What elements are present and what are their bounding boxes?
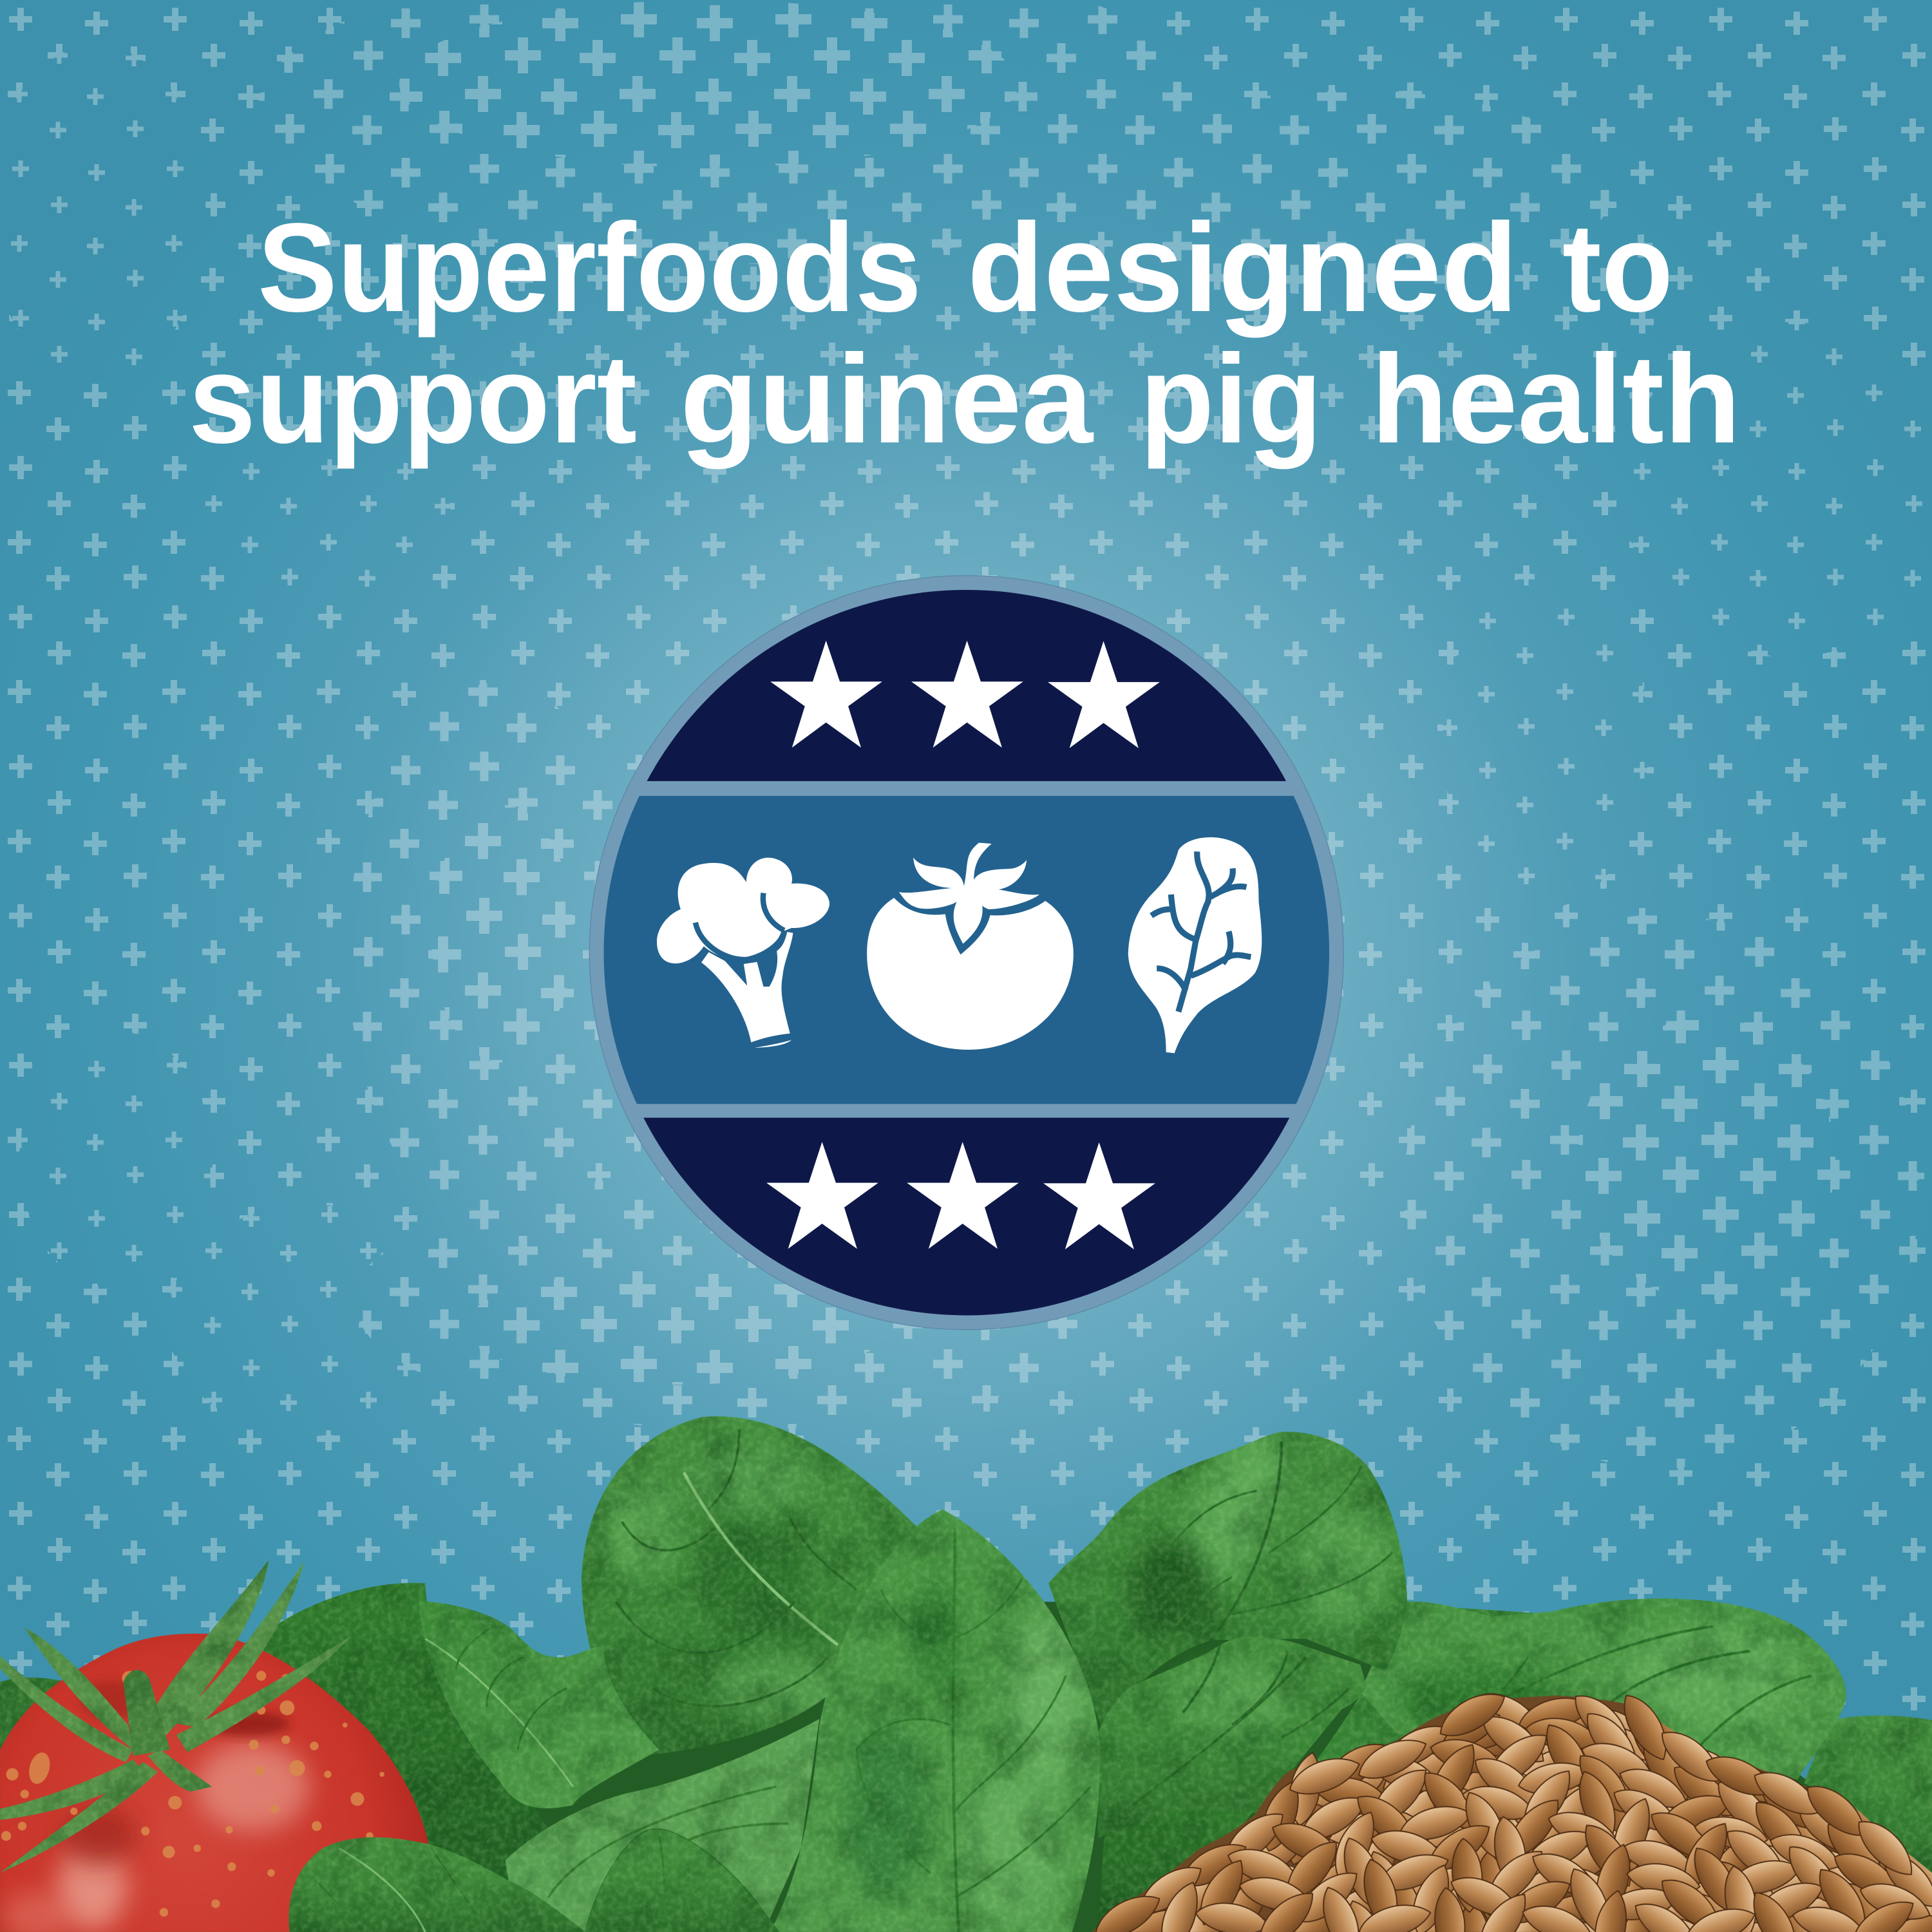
food photo band: spinach, tomato and flax seeds [0,1416,1932,1932]
title [189,197,1741,469]
tomato calyx [0,1560,351,1873]
badge: round emblem with stars and vegetable icons [580,567,1352,1340]
title: Superfoods [258,197,922,338]
spinach leaves: back layer [0,1416,1932,1880]
title: to [1562,197,1673,338]
icon: tomato [867,843,1074,1050]
title: pig [1140,328,1322,469]
spinach leaves: middle layer [419,1510,1367,1932]
icon: top row of three stars [770,641,1160,748]
title: health [1371,328,1741,469]
icon: broccoli [657,858,829,1048]
icon: spinach leaf [1128,837,1262,1053]
title: designed [967,197,1518,338]
title: support [189,328,637,469]
tomato with droplets [0,1560,431,1932]
spinach leaves: front layer [289,1829,779,1932]
title: guinea [680,328,1094,469]
icon: bottom row of three stars [766,1142,1155,1249]
flax seed pile [1088,1683,1932,1932]
spinach leaves: shadowed base [0,1602,1932,1932]
